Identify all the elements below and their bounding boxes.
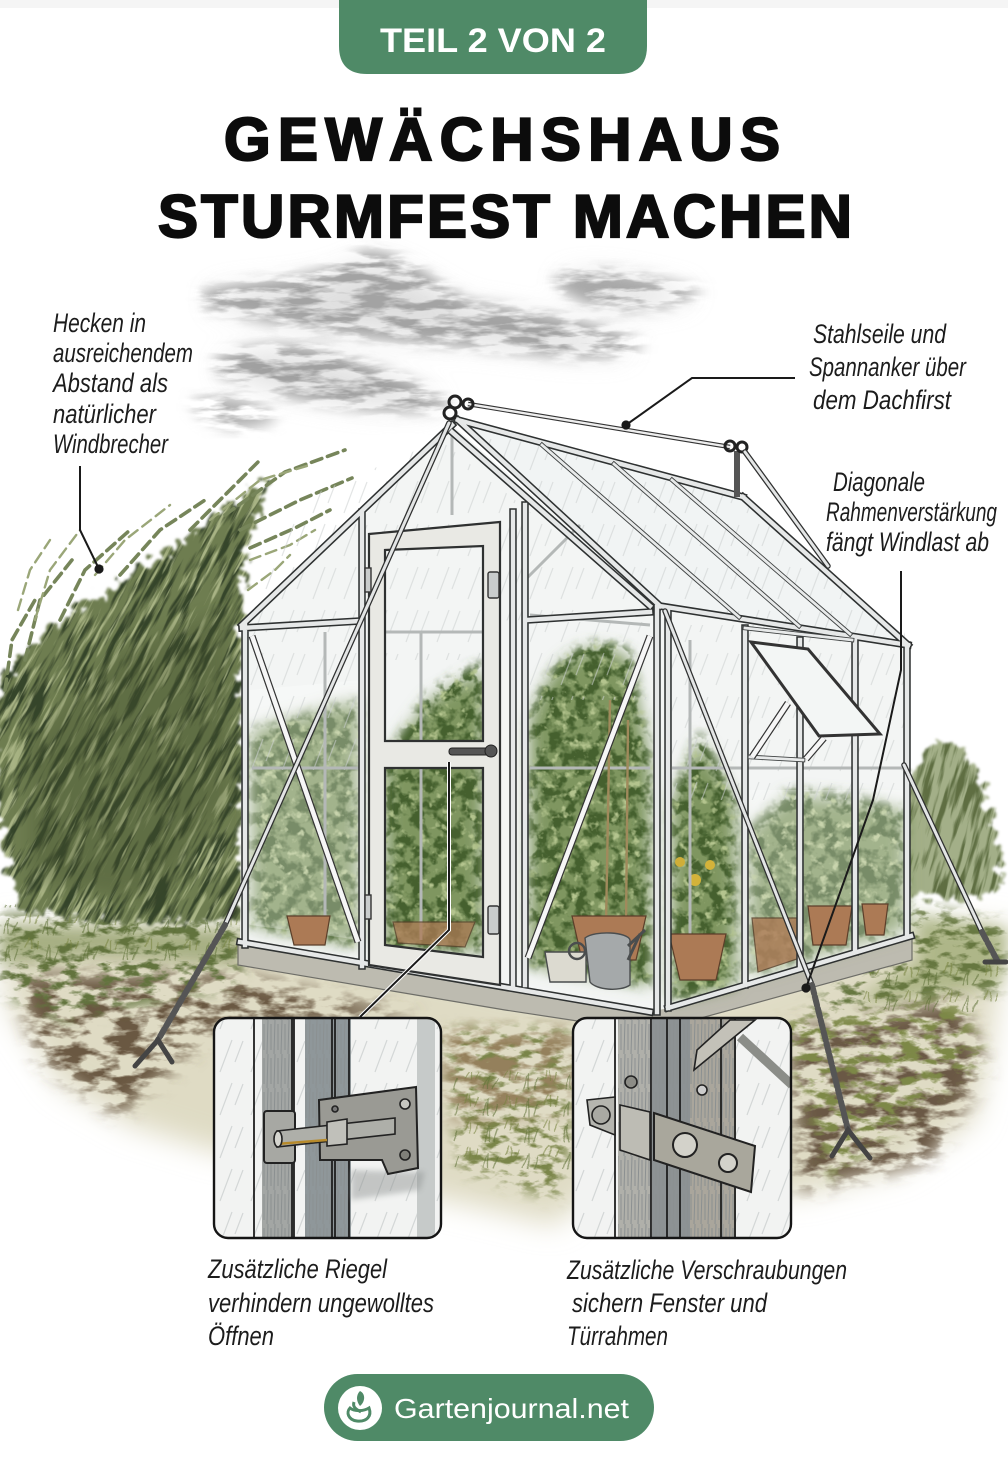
callout line: steel cable xyxy=(622,378,795,429)
label: extra bolts: verhindern ungewolltes xyxy=(208,1288,434,1318)
plant stakes xyxy=(606,700,628,925)
callout line core: door bolt xyxy=(360,762,449,1017)
label: steel cables: Stahlseile und xyxy=(813,319,947,349)
glass walls and roof xyxy=(240,425,908,1012)
clouds xyxy=(190,251,705,429)
callout line: hedge xyxy=(80,466,103,573)
flower pots xyxy=(287,904,888,980)
greenhouse foundation xyxy=(238,936,912,1032)
bolt mounting plate xyxy=(319,1087,418,1174)
label: hedges: natürlicher xyxy=(53,399,157,429)
label: diagonal reinforcement: Diagonale xyxy=(833,467,925,497)
top badge xyxy=(339,0,647,74)
door hinges xyxy=(365,568,499,934)
callout line: diagonal reinforcement xyxy=(802,571,901,992)
aluminium frame xyxy=(240,420,911,1012)
top badge: TEIL 2 VON 2 xyxy=(380,22,606,60)
label: hedges: Windbrecher xyxy=(53,429,169,459)
label: hedges: Abstand als xyxy=(51,368,168,398)
wind-blown wisps of the hedge xyxy=(5,450,352,690)
tension cables and ground anchors xyxy=(135,423,1006,1158)
label: hedges: Hecken in xyxy=(53,308,146,338)
label: steel cables xyxy=(809,319,967,415)
label: extra screws xyxy=(566,1255,847,1351)
label: extra bolts: Zusätzliche Riegel xyxy=(207,1254,388,1284)
label: extra bolts xyxy=(207,1254,434,1351)
inset: door bolt detail xyxy=(214,1018,441,1238)
inset: screwed hinge detail xyxy=(573,1018,792,1238)
title: GEWÄCHSHAUS xyxy=(224,106,780,173)
label: hedges: ausreichendem xyxy=(53,338,193,368)
greenhouse xyxy=(135,396,1006,1158)
ground: grass and soil xyxy=(0,905,1008,1225)
label: diagonal reinforcement xyxy=(826,467,997,557)
steel ridge post xyxy=(734,451,740,497)
icon: plant in bowl xyxy=(338,1386,382,1430)
label: extra bolts: Öffnen xyxy=(208,1321,274,1351)
rear frame seen through glass xyxy=(252,432,905,960)
title xyxy=(158,106,852,250)
plants behind the glass xyxy=(250,643,905,1000)
label: extra screws: sichern Fenster und xyxy=(572,1288,768,1318)
roof glazing xyxy=(458,420,908,645)
label: extra screws: Zusätzliche Verschraubungen xyxy=(566,1255,847,1285)
label: steel cables: dem Dachfirst xyxy=(813,385,952,415)
steel cable over the ridge xyxy=(444,396,747,452)
footer brand badge xyxy=(324,1374,654,1441)
door bolt xyxy=(449,745,497,757)
left hinge leaf and bolts xyxy=(587,1076,707,1160)
hinge strap xyxy=(654,1113,755,1192)
open roof window xyxy=(751,642,880,736)
hedge windbreak, bent by wind xyxy=(0,448,354,930)
callout line halo: door bolt xyxy=(360,762,449,1017)
wind and glass streaks xyxy=(250,420,908,800)
bolt receiver plate xyxy=(264,1111,295,1163)
slide bolt xyxy=(274,1099,410,1160)
bush on the right xyxy=(910,738,1008,906)
brand name: Gartenjournal.net xyxy=(394,1393,629,1424)
watering can and bucket xyxy=(545,930,645,989)
diagonal frame braces xyxy=(252,636,824,958)
door leaf with glazed openings xyxy=(369,522,500,985)
title: STURMFEST MACHEN xyxy=(158,183,852,250)
label: hedges xyxy=(51,308,193,459)
label: extra screws: Türrahmen xyxy=(567,1321,668,1351)
